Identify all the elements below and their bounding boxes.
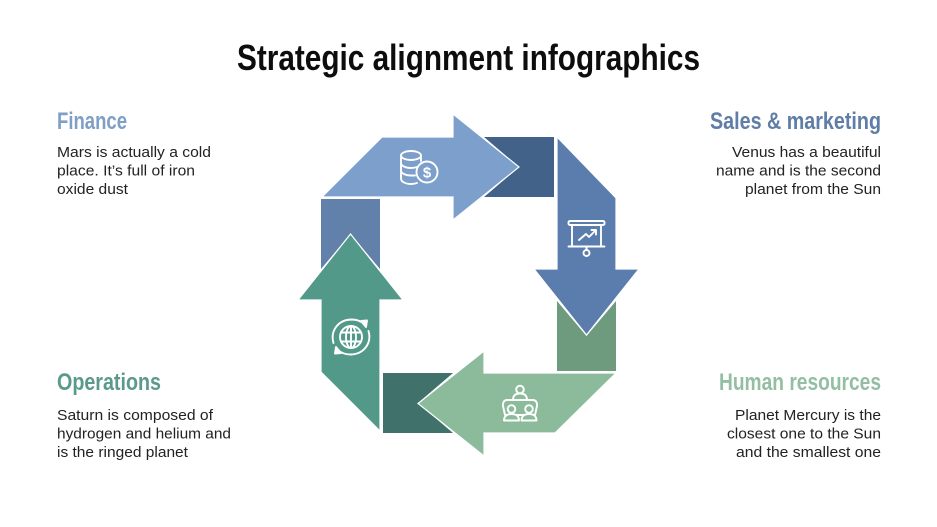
- body: sales and marketing: Venus has a beautiful: [732, 144, 881, 161]
- body: sales and marketing: name and is the second: [716, 162, 881, 180]
- title: Strategic alignment infographics: [237, 37, 700, 78]
- arrow: human resources: [418, 351, 616, 456]
- arrow: sales and marketing: [534, 137, 639, 335]
- icon: coins: [401, 151, 438, 184]
- icon: people at a table: [503, 386, 537, 420]
- block: green connector: [557, 301, 616, 371]
- block: dark green connector: [383, 373, 453, 433]
- icon: globe with cycle arrows: [333, 320, 369, 354]
- body: sales and marketing: [716, 144, 881, 198]
- heading: operations: Operations: [57, 369, 161, 396]
- heading: sales and marketing: Sales & marketing: [710, 108, 881, 135]
- body: sales and marketing: planet from the Sun: [745, 181, 881, 198]
- arrow: operations: [298, 234, 403, 431]
- body: human resources: closest one to the Sun: [727, 426, 881, 442]
- arrow: finance: [322, 114, 519, 220]
- body: finance: place. It’s full of iron: [57, 162, 195, 180]
- panel: finance text: [57, 108, 211, 198]
- body: human resources: [727, 407, 881, 461]
- body: finance: Mars is actually a cold: [57, 144, 211, 161]
- panel: human resources text: [719, 369, 881, 461]
- panel: sales and marketing text: [710, 108, 881, 198]
- cycle diagram: [298, 114, 639, 456]
- block: dark blue connector: [484, 137, 554, 197]
- body: operations: Saturn is composed of: [57, 407, 214, 424]
- body: human resources: and the smallest one: [736, 444, 881, 461]
- icon: presentation board: [568, 221, 604, 256]
- body: operations: [57, 407, 231, 461]
- body: human resources: Planet Mercury is the: [735, 407, 881, 424]
- body: operations: hydrogen and helium and: [57, 426, 231, 442]
- icon: coins: $: [423, 164, 432, 182]
- body: finance: oxide dust: [57, 181, 129, 198]
- heading: human resources: Human resources: [719, 369, 881, 396]
- body: operations: is the ringed planet: [57, 444, 189, 461]
- panel: operations text: [57, 369, 231, 461]
- heading: finance: Finance: [57, 108, 127, 135]
- block: slate blue connector: [321, 199, 380, 269]
- body: finance: [57, 144, 211, 198]
